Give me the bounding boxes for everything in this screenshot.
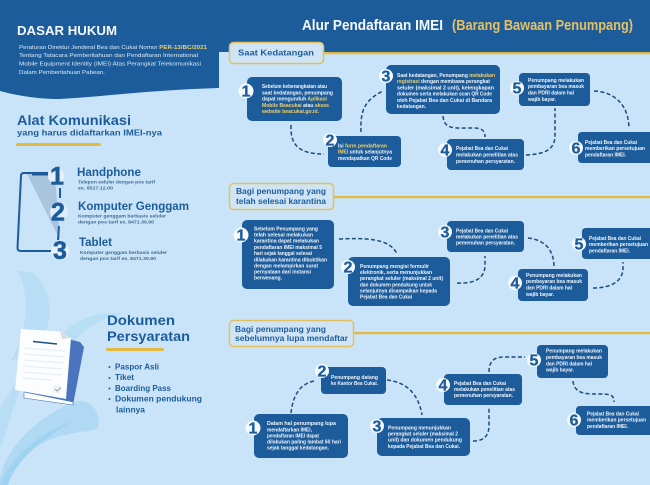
step 2: mendapatkan QR Code [338, 156, 392, 162]
step 1: dilakukan paling lambat 60 hari [267, 439, 341, 445]
step 4: 4 [511, 276, 520, 292]
text: tablet: Komputer genggam berbasis seluler [80, 250, 167, 256]
step 4 [508, 269, 588, 301]
step 1: karantina dapat melakukan [254, 239, 319, 245]
heading: alat komunikasi: yang harus didaftarkan IMEI-nya [17, 128, 162, 138]
title: Alur Pendaftaran IMEI [302, 17, 443, 34]
step 2: elektronik, serta menunjukkan [360, 270, 432, 276]
step 3: 3 [441, 224, 450, 242]
step 5 [527, 345, 608, 378]
legal text: Peraturan Direktur Jenderal Bea dan Cukai Nomor PER-13/BC/2021 [19, 45, 207, 51]
step 3: 3 [373, 418, 382, 436]
step 1: mendaftarkan IMEI, [267, 427, 312, 433]
step 1: dilakukan karantina dibuktikan [254, 257, 327, 263]
step 1: Mobile Beacukai atau akses [262, 103, 329, 109]
step 4: pembayaran bea masuk [526, 279, 582, 285]
list: required documents: lainnya [116, 406, 146, 414]
step 1: dapat mengunduh Aplikasi [262, 96, 327, 102]
decorative feathers [0, 271, 125, 485]
legal text: Mobile Equipment Identity (IMEI) Atas Perangkat Telekomunikasi [19, 62, 201, 68]
step 4: wajib bayar. [525, 292, 554, 298]
step 2 [323, 132, 401, 167]
text: handphone: Telepon seluler dengan pos tarif [78, 180, 155, 186]
list: required documents: Tiket [115, 373, 134, 382]
step 3: pemenuhan persyaratan. [456, 241, 515, 247]
step 3: dokumen serta melakukan scan QR Code [397, 92, 492, 98]
step 6: pendaftaran IMEI. [587, 424, 628, 430]
step 4: 4 [441, 142, 450, 160]
step 5: 5 [575, 236, 584, 254]
text: komputer genggam [78, 201, 189, 226]
text: tablet [79, 237, 167, 262]
step 6 [567, 406, 650, 435]
section: selesai karantina [230, 184, 650, 306]
badge: selesai karantina: telah selesai karantina [236, 196, 326, 206]
step 6: memberikan persetujuan [585, 146, 645, 152]
legal text: Dalam Pemberitahuan Pabean. [19, 70, 105, 76]
step 4: Pejabat Bea dan Cukai [454, 381, 506, 387]
step 1: Sebelum keberangkatan atau [262, 84, 327, 90]
step 1: berwenang. [254, 276, 282, 282]
step 2: dan dokumen pendukung untuk [360, 283, 432, 289]
step 3: oleh Pejabat Bea dan Cukai di Bandara [397, 98, 492, 104]
step 1: sejak tanggal kedatangan. [267, 445, 329, 451]
title [302, 17, 633, 34]
step 3: kepada Pejabat Bea dan Cukai. [388, 444, 460, 450]
step 5: pendaftaran IMEI. [589, 248, 630, 254]
step 2 [341, 257, 450, 306]
list: required documents: Paspor Asli [115, 362, 159, 372]
step 1: telah selesai melakukan [254, 233, 313, 239]
step 2: 2 [318, 364, 327, 380]
step 5: 5 [513, 80, 522, 98]
step 6: Pejabat Bea dan Cukai [585, 140, 637, 146]
step 1: hari sejak tanggal selesai [254, 251, 312, 257]
step 1: 1 [249, 420, 258, 438]
icon: phone with numbered list: 2 [51, 198, 65, 226]
step 3: 3 [382, 68, 391, 86]
step 5: memberikan persetujuan [589, 242, 648, 248]
step 3: unit) dan dokumen pendukung [388, 438, 462, 444]
badge: selesai karantina [230, 184, 334, 210]
step 1: Dalam hal penumpang lupa [267, 421, 336, 427]
step 5: dan PDRI dalam hal [546, 361, 592, 367]
step 2: Penumpang datang [331, 375, 378, 381]
heading: dokumen persyaratan: Dokumen [107, 312, 175, 328]
step 4: pemenuhan persyaratan. [454, 393, 513, 399]
step 1: pendaftaran IMEI maksimal 5 [254, 245, 322, 251]
heading: alat komunikasi [16, 112, 162, 146]
text: komputer genggam: dengan pos tarif ex. 8471.30.90 [78, 220, 154, 226]
list: required documents: Dokumen pendukung [115, 394, 202, 404]
step 5: Penumpang melakukan [546, 349, 602, 355]
step 3: Pejabat Bea dan Cukai [456, 228, 508, 234]
legal text [19, 45, 207, 76]
step 3: kedatangan. [397, 104, 426, 110]
step 4 [436, 374, 522, 405]
step 4: Pejabat Bea dan Cukai [456, 146, 508, 152]
header band [0, 0, 650, 99]
text: handphone: Handphone [77, 167, 141, 179]
connectors [291, 357, 614, 441]
step 5: 5 [530, 352, 539, 370]
text: komputer genggam: Komputer genggam berbasis seluler [78, 214, 166, 220]
badge: saat kedatangan [230, 42, 324, 64]
step 4 [438, 139, 524, 170]
step 2: Isi form pendaftaran [338, 144, 387, 150]
step 5: pembayaran bea masuk [528, 84, 584, 90]
step 2: Pejabat Bea dan Cukai [360, 295, 412, 301]
step 6: memberikan persetujuan [587, 418, 646, 424]
step 1 [238, 77, 342, 121]
step 4: 4 [439, 378, 448, 394]
badge: lupa mendaftar: Bagi penumpang yang [235, 324, 326, 334]
badge: lupa mendaftar: sebelumnya lupa mendaftar [235, 333, 349, 343]
step 5 [572, 228, 650, 259]
step 1: dengan melampirkan surat [254, 263, 318, 269]
text: komputer genggam: Komputer Genggam [78, 201, 189, 213]
step 6: 6 [570, 412, 579, 430]
step 2: Penumpang mengisi formulir [360, 264, 429, 270]
heading: dasar hukum: DASAR HUKUM [17, 23, 117, 38]
step 1: pendaftaran IMEI dapat [267, 433, 319, 439]
step 1: website beacukai.go.id. [261, 109, 320, 115]
step 4: melakukan penelitian atas [454, 387, 515, 393]
step 2: ke Kantor Bea Cukai. [331, 381, 378, 387]
heading: dokumen persyaratan: Persyaratan [107, 328, 190, 344]
step 5: pembayaran bea masuk [546, 355, 602, 361]
step 2: selanjutnya disampaikan kepada [360, 289, 437, 295]
connectors [339, 238, 623, 288]
step 5 [510, 73, 590, 106]
step 6: pendaftaran IMEI. [585, 152, 626, 158]
list: required documents [108, 362, 202, 414]
badge: selesai karantina: Bagi penumpang yang [236, 186, 326, 196]
step 2: IMEI untuk selanjutnya [338, 150, 392, 156]
step 3: registrasi dengan membawa perangkat [397, 79, 490, 85]
text: tablet: Tablet [79, 237, 112, 249]
step 3 [379, 65, 500, 114]
step 1 [246, 414, 348, 458]
step 5: wajib bayar. [545, 368, 574, 374]
icon: documents [15, 329, 84, 405]
legal text: Tentang Tatacara Pemberitahuan dan Pendaftaran International [19, 53, 198, 59]
step 5: Pejabat Bea dan Cukai [589, 236, 641, 242]
step 3: seluler (maksimal 2 unit), kelengkapan [397, 86, 494, 92]
list: required documents: Boarding Pass [115, 384, 172, 393]
step 3: melakukan penelitian atas [456, 234, 518, 240]
step 4: pemenuhan persyaratan. [456, 159, 515, 165]
step 1: pernyataan dari instansi [254, 270, 311, 276]
step 6 [569, 132, 650, 163]
step 3: Saat kedatangan, Penumpang melakukan [397, 73, 495, 79]
panel: dasar hukum [17, 23, 207, 76]
step 1: 1 [237, 228, 246, 244]
step 2: perangkat seluler (maksimal 2 unit) [360, 276, 443, 282]
step 4: dan PDRI dalam hal [526, 286, 572, 292]
icon: phone with numbered list: 3 [53, 237, 67, 265]
step 5: dan PDRI dalam hal [528, 90, 574, 96]
step 3 [438, 221, 524, 252]
text: handphone: ex. 8517.12.00 [78, 186, 113, 192]
section: lupa mendaftar [230, 320, 650, 458]
step 2: 2 [326, 132, 335, 150]
step 6: 6 [572, 140, 581, 158]
text: handphone [77, 167, 155, 192]
heading: dokumen persyaratan [106, 312, 190, 351]
step 5: Penumpang melakukan [528, 78, 584, 84]
icon: phone with numbered list [18, 162, 69, 265]
step 1 [234, 220, 334, 289]
step 1: saat kedatangan, penumpang [262, 90, 333, 96]
badge: saat kedatangan: Saat Kedatangan [238, 48, 314, 58]
connectors [291, 91, 629, 155]
section: saat kedatangan [230, 42, 650, 170]
step 1: Sebelum Penumpang yang [254, 227, 318, 233]
step 3: perangkat seluler (maksimal 2 [388, 432, 458, 438]
step 1: 1 [242, 84, 251, 100]
step 4: melakukan penelitian atas [456, 152, 518, 158]
badge: lupa mendaftar [230, 320, 354, 346]
step 5: wajib bayar. [527, 97, 556, 103]
step 6: Pejabat Bea dan Cukai [587, 411, 639, 417]
icon: phone with numbered list: 1 [50, 162, 64, 190]
step 4: Penumpang melakukan [526, 273, 582, 279]
step 3: Penumpang menunjukkan [388, 425, 451, 431]
step 3 [370, 418, 470, 456]
step 2: 2 [344, 260, 353, 276]
text: tablet: dengan pos tarif ex. 8471.30.90 [80, 256, 156, 262]
step 2 [315, 364, 386, 394]
heading: alat komunikasi: Alat Komunikasi [17, 112, 131, 128]
